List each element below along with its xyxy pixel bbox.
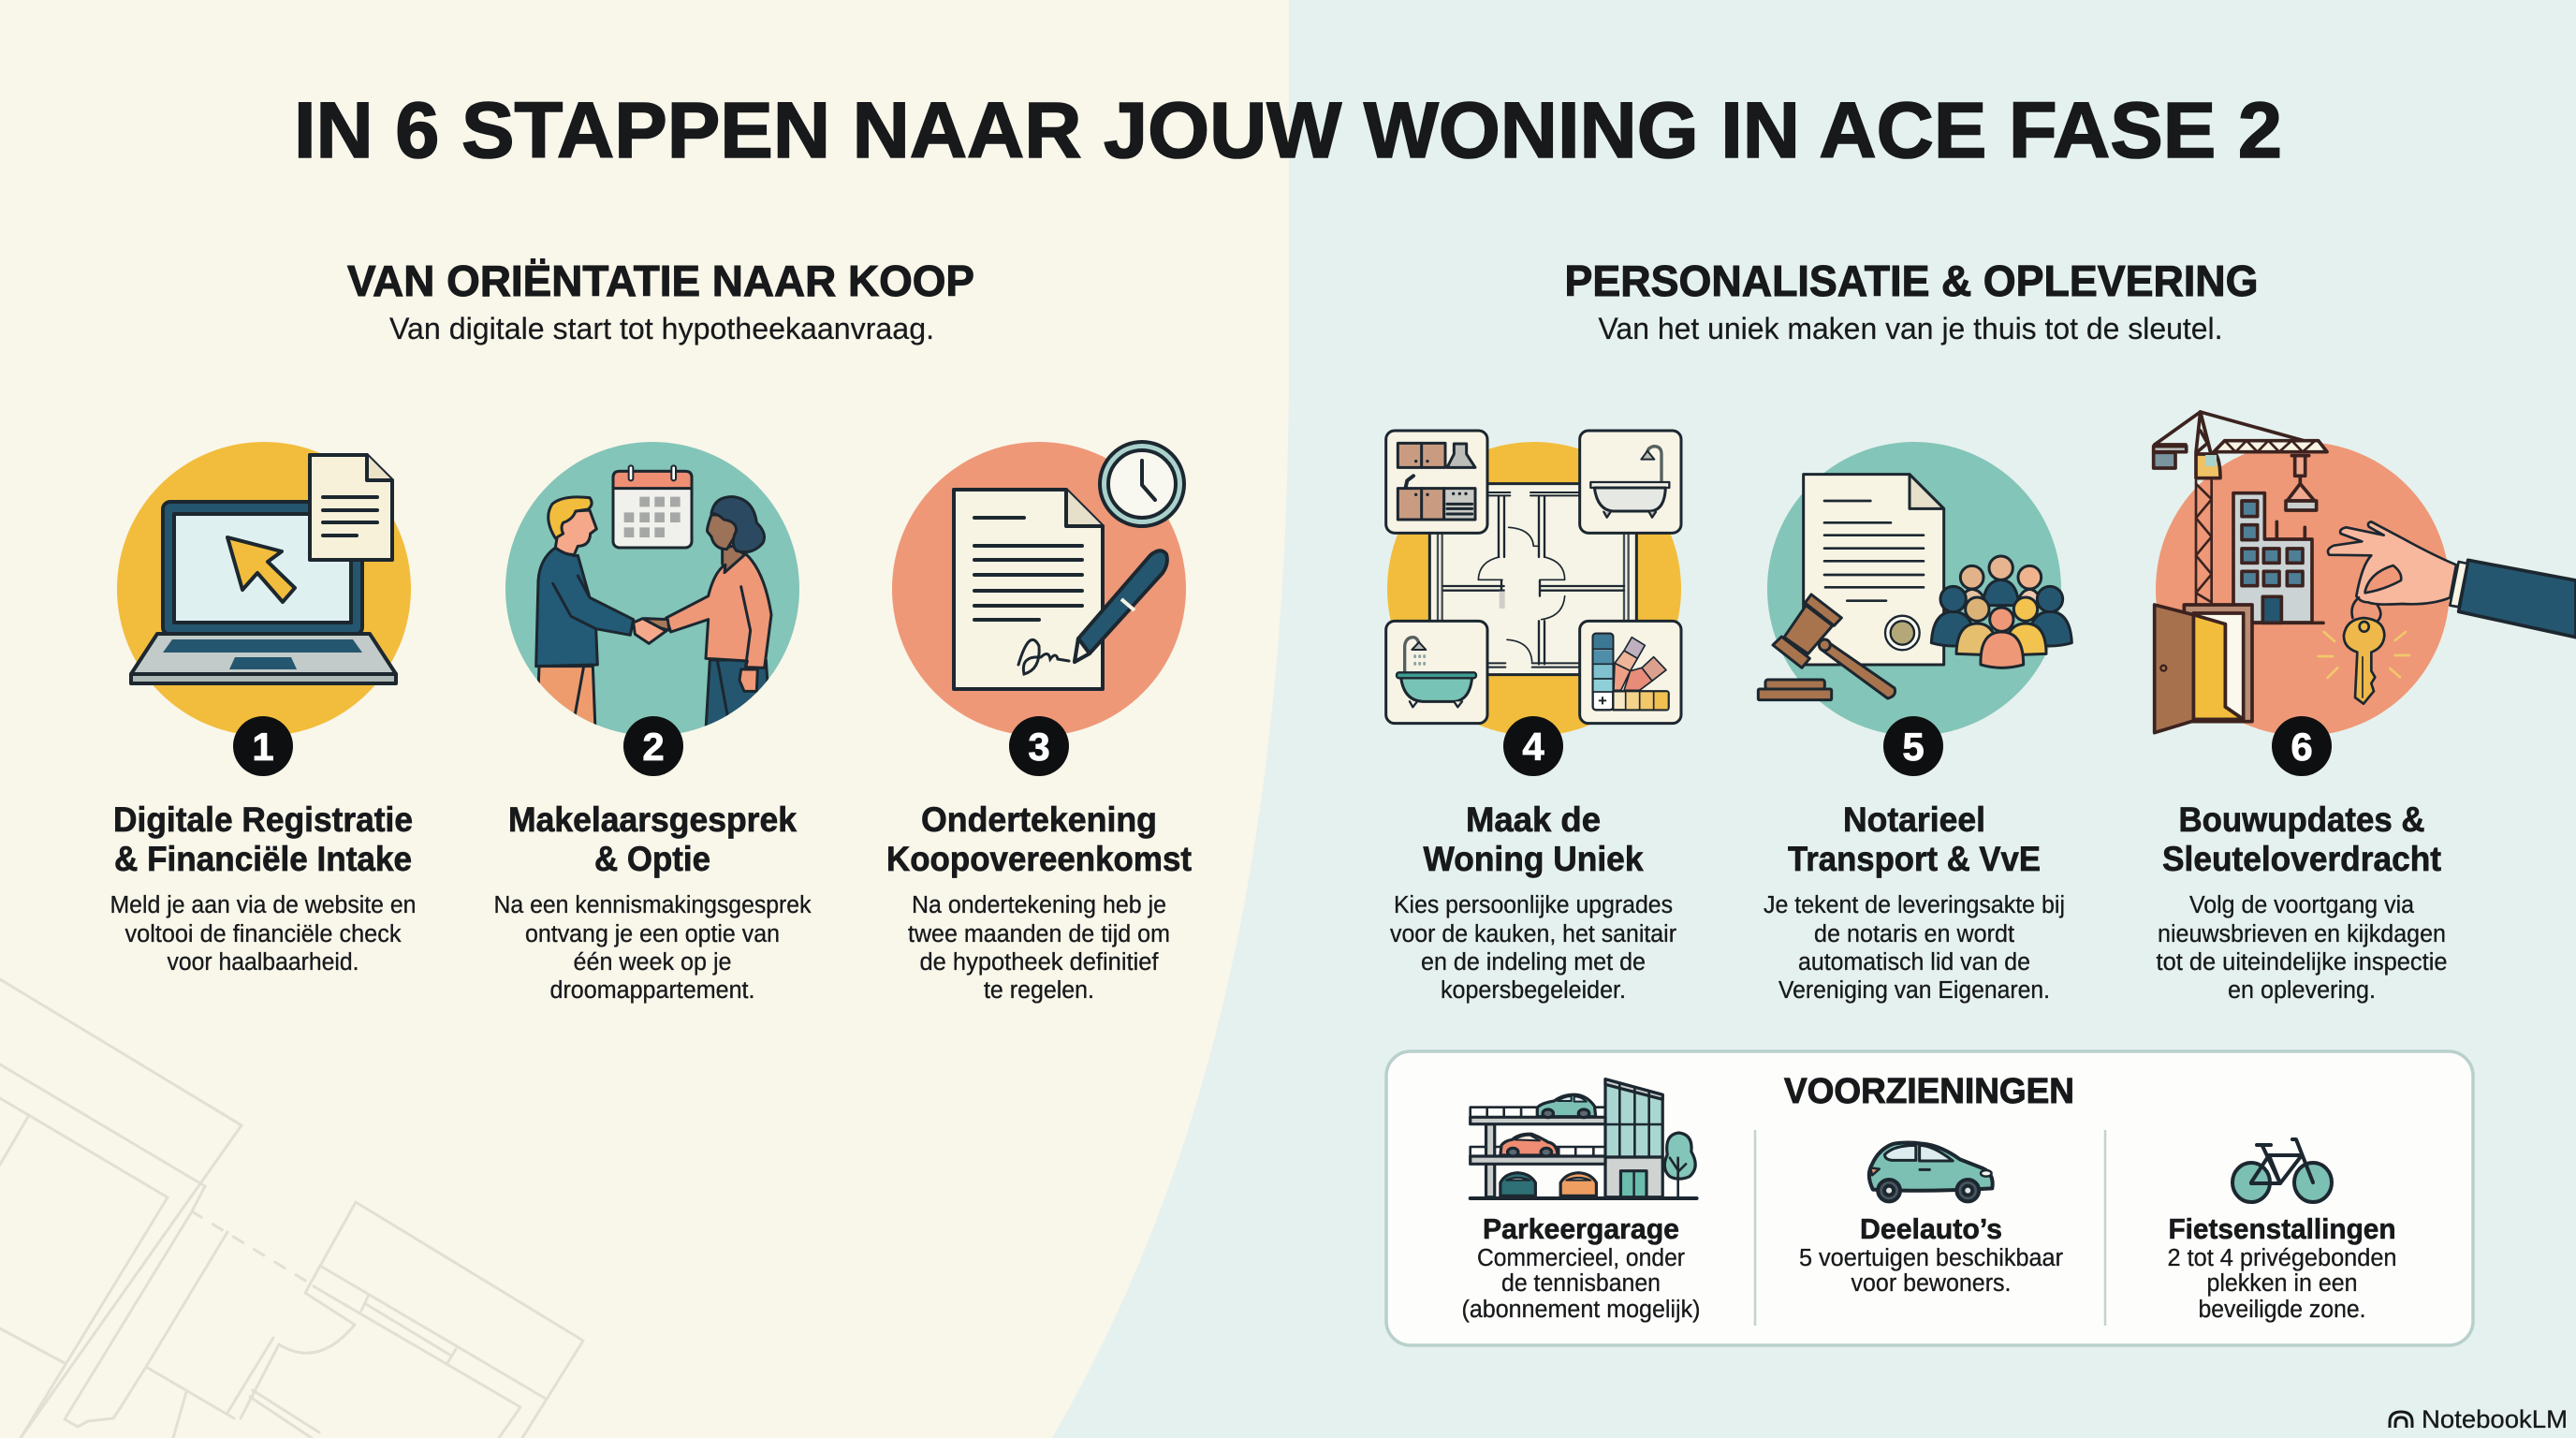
- step 2 text: ontvang je een optie van: [525, 921, 780, 947]
- open door: [2155, 605, 2252, 733]
- fietsenstallingen text: Fietsenstallingen: [2168, 1212, 2396, 1245]
- bathtub tile: [1580, 431, 1681, 533]
- step 5 text: de notaris en wordt: [1814, 921, 2014, 947]
- hand: [2328, 521, 2456, 605]
- parkeergarage text: de tennisbanen: [1501, 1270, 1661, 1297]
- step 3 text: te regelen.: [984, 977, 1094, 1004]
- step 5 text: [1764, 892, 2065, 1004]
- parkeergarage text: (abonnement mogelijk): [1462, 1297, 1700, 1323]
- step 5 heading: [1788, 800, 2041, 878]
- step 2 heading: & Optie: [594, 840, 710, 878]
- background: right panel: [1052, 0, 2576, 1438]
- number badge 6: [2272, 716, 2332, 776]
- notebooklm logo: NotebookLM: [2422, 1405, 2568, 1433]
- step 6: [2154, 412, 2576, 1004]
- step 4 text: [1390, 892, 1676, 1004]
- step 5 text: Vereniging van Eigenaren.: [1778, 977, 2050, 1004]
- step 6 text: nieuwsbrieven en kijkdagen: [2158, 921, 2446, 947]
- step 1 heading: Digitale Registratie: [113, 800, 413, 839]
- step 4 heading: Woning Uniek: [1423, 840, 1644, 878]
- number badge 2: 2: [642, 725, 665, 769]
- number badge 5: 5: [1902, 725, 1925, 769]
- number badge 4: 4: [1522, 725, 1544, 769]
- number badge 6: 6: [2291, 725, 2313, 769]
- parkeergarage text: Parkeergarage: [1483, 1212, 1679, 1245]
- step 5 heading: Transport & VvE: [1788, 840, 2041, 878]
- heading: left section: Van digitale start tot hypotheekaanvraag.: [389, 312, 934, 345]
- background: blueprint floor plan: [0, 979, 583, 1438]
- parkeergarage text: Commercieel, onder: [1477, 1245, 1685, 1271]
- icon: crane, building, door and hand with key: [2154, 412, 2576, 736]
- panel: voorzieningen: [1386, 1051, 2473, 1345]
- icon: parking garage: [1471, 1079, 1697, 1198]
- building: [2233, 493, 2323, 623]
- step 1 heading: [113, 800, 413, 878]
- step 3 text: twee maanden de tijd om: [908, 921, 1170, 947]
- icon: handshake and calendar: [505, 442, 799, 736]
- step 3 text: Na ondertekening heb je: [912, 892, 1166, 918]
- fietsenstallingen text: plekken in een: [2207, 1270, 2357, 1297]
- number badge 3: 3: [1028, 725, 1050, 769]
- step 4 heading: [1423, 800, 1644, 878]
- shower tile: [1386, 621, 1487, 724]
- number badge 1: [233, 716, 293, 776]
- icon: floor plan with room tiles: [1386, 431, 1681, 736]
- step 4 text: kopersbegeleider.: [1441, 977, 1626, 1004]
- number badge 5: [1883, 716, 1943, 776]
- step 3 heading: Koopovereenkomst: [886, 840, 1192, 878]
- step 3 heading: [886, 800, 1192, 878]
- crane: [2154, 412, 2327, 602]
- icon: deed, gavel and residents group: [1758, 442, 2071, 736]
- step 5: [1758, 442, 2071, 1004]
- step 1 text: [110, 892, 416, 976]
- step 2 heading: [508, 800, 797, 878]
- fietsenstallingen text: [2168, 1212, 2396, 1323]
- sleeve: [2450, 560, 2576, 638]
- step 3 text: [908, 892, 1170, 1004]
- heading: right section: [1565, 257, 2258, 345]
- step 4 heading: Maak de: [1466, 800, 1601, 839]
- step 6 heading: [2162, 800, 2441, 878]
- step 2 text: Na een kennismakingsgesprek: [494, 892, 812, 918]
- deelauto's text: [1799, 1212, 2063, 1297]
- step 1 text: voor haalbaarheid.: [167, 949, 359, 976]
- step 2 text: droomappartement.: [550, 977, 754, 1004]
- fietsenstallingen text: beveiligde zone.: [2198, 1297, 2366, 1323]
- step 6 heading: Bouwupdates &: [2179, 800, 2424, 839]
- step 6 text: en oplevering.: [2228, 977, 2376, 1004]
- step 1 text: Meld je aan via de website en: [110, 892, 416, 918]
- step 1 text: voltooi de financiële check: [125, 921, 402, 947]
- deelauto's text: voor bewoners.: [1852, 1270, 2011, 1297]
- heading: left section: VAN ORIËNTATIE NAAR KOOP: [347, 257, 974, 305]
- fietsenstallingen text: 2 tot 4 privégebonden: [2168, 1245, 2396, 1271]
- kitchen tile: [1386, 431, 1487, 533]
- step 3: [886, 442, 1192, 1004]
- panel heading: VOORZIENINGEN: [1784, 1072, 2074, 1111]
- number badge 2: [623, 716, 683, 776]
- step 4 text: voor de kauken, het sanitair: [1390, 921, 1676, 947]
- deelauto's text: Deelauto’s: [1860, 1212, 2002, 1245]
- step 5 heading: Notarieel: [1843, 800, 1985, 839]
- heading: left section: [347, 257, 974, 345]
- step 6 text: tot de uiteindelijke inspectie: [2157, 949, 2447, 976]
- heading: right section: Van het uniek maken van je thuis tot de sleutel.: [1599, 312, 2222, 345]
- gavel: [1758, 594, 1895, 700]
- icon: bicycle: [2232, 1139, 2332, 1202]
- step 5 text: automatisch lid van de: [1798, 949, 2030, 976]
- residents group: [1931, 556, 2071, 668]
- number badge 1: 1: [252, 725, 274, 769]
- step 2 heading: Makelaarsgesprek: [508, 800, 797, 839]
- key sparkle rays: [2319, 632, 2409, 678]
- step 4: [1386, 431, 1681, 1004]
- deelauto's text: 5 voertuigen beschikbaar: [1799, 1245, 2063, 1271]
- key: [2344, 597, 2384, 704]
- step 3 text: de hypotheek definitief: [919, 949, 1159, 976]
- icon: laptop with cursor and document: [117, 442, 411, 736]
- parkeergarage text: [1462, 1212, 1700, 1323]
- colour swatch tile: [1580, 621, 1681, 724]
- step 5 text: Je tekent de leveringsakte bij: [1764, 892, 2065, 918]
- step 2 text: één week op je: [573, 949, 732, 976]
- title: IN 6 STAPPEN NAAR JOUW WONING IN ACE FASE 2: [294, 86, 2282, 174]
- step 3 heading: Ondertekening: [921, 800, 1157, 839]
- step 6 text: Volg de voortgang via: [2189, 892, 2415, 918]
- step 6 heading: Sleuteloverdracht: [2162, 840, 2441, 878]
- icon: signed contract, clock and pen: [892, 442, 1186, 736]
- step 6 text: [2157, 892, 2447, 1004]
- step 4 text: en de indeling met de: [1421, 949, 1646, 976]
- number badge 3: [1009, 716, 1069, 776]
- step 1 heading: & Financiële Intake: [114, 840, 412, 878]
- step 4 text: Kies persoonlijke upgrades: [1394, 892, 1673, 918]
- step 1: [110, 442, 416, 976]
- step 2 text: [494, 892, 812, 1004]
- number badge 4: [1503, 716, 1563, 776]
- heading: right section: PERSONALISATIE & OPLEVERING: [1565, 257, 2258, 305]
- step 2: [494, 442, 812, 1004]
- icon: shared car: [1869, 1142, 1993, 1201]
